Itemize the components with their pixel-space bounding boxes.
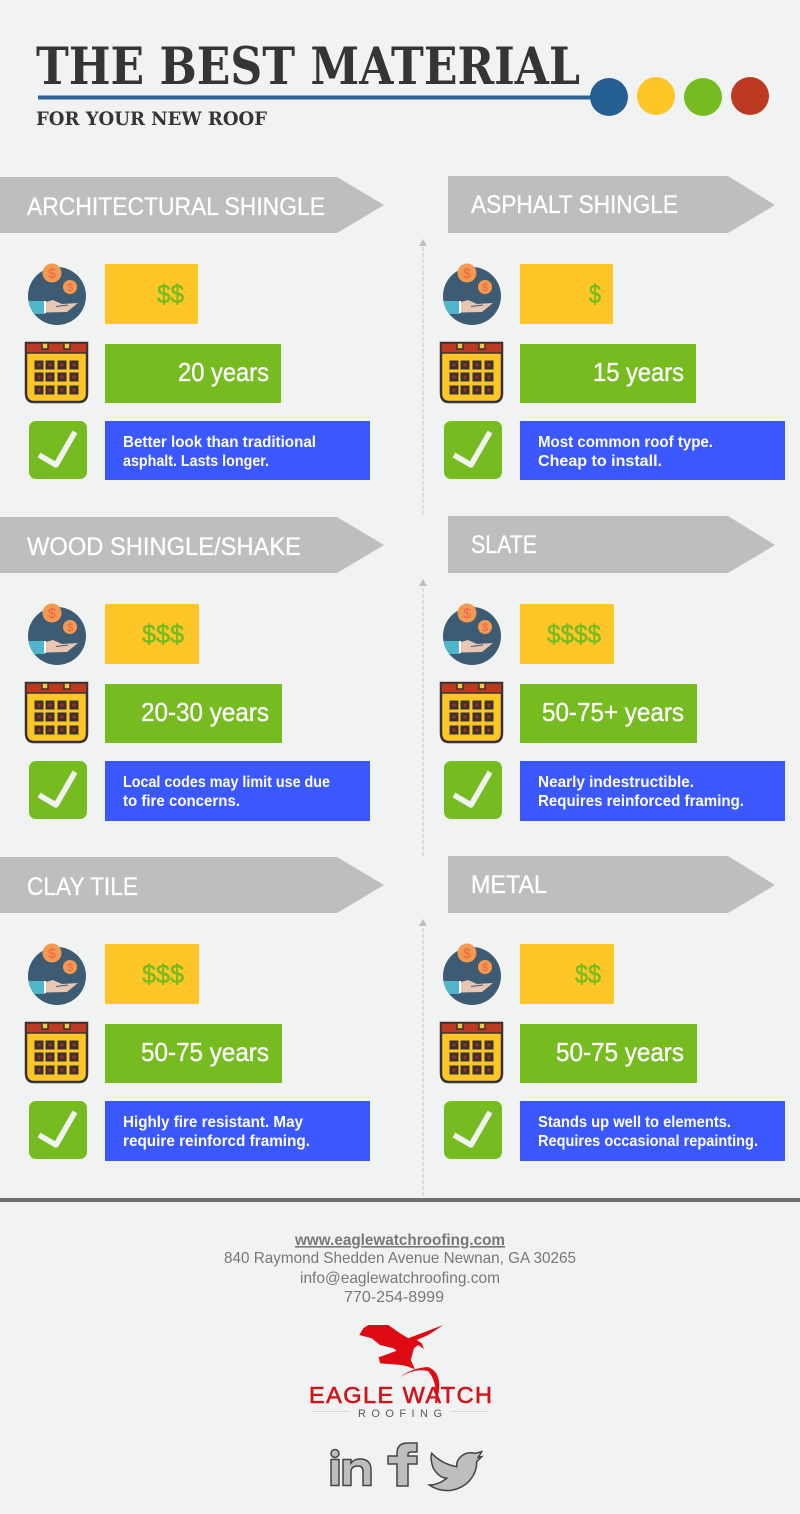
icons	[441, 264, 502, 479]
heading	[0, 857, 384, 913]
description: Requires occasional repainting.	[538, 1133, 758, 1150]
description: Nearly indestructible.	[538, 774, 694, 791]
dashed arrow 3	[419, 919, 427, 1196]
roofing: ROOFING	[358, 1408, 442, 1420]
description: Better look than traditional	[123, 434, 316, 451]
lifespan	[520, 1024, 697, 1083]
description	[105, 1101, 370, 1161]
description	[520, 1101, 785, 1161]
description	[105, 761, 370, 821]
title underline	[38, 96, 593, 100]
icons	[26, 604, 87, 819]
heading: ARCHITECTURAL SHINGLE	[27, 193, 325, 221]
lifespan: 50-75 years	[556, 1037, 684, 1067]
cost: $$	[575, 959, 601, 989]
heading: CLAY TILE	[27, 873, 138, 901]
cost	[105, 264, 198, 324]
colour dots	[590, 77, 769, 116]
lifespan: 15 years	[593, 357, 684, 387]
icon: twitter	[429, 1452, 482, 1491]
cost	[520, 604, 614, 664]
panel: architectural shingle	[0, 177, 384, 480]
social icons	[331, 1443, 482, 1491]
footer contact text: 840 Raymond Shedden Avenue Newnan, GA 30265	[224, 1250, 576, 1267]
subtitle: FOR YOUR NEW ROOF	[36, 109, 267, 130]
lifespan: 50-75 years	[141, 1037, 269, 1067]
title: THE BEST MATERIAL	[36, 37, 580, 97]
description	[520, 761, 785, 821]
description: to fire concerns.	[123, 793, 240, 810]
panel: wood shingle/shake	[0, 517, 384, 821]
cost: $$$	[142, 959, 185, 989]
logo: eagle watch roofing	[309, 1325, 492, 1420]
icons	[26, 944, 87, 1159]
heading: METAL	[471, 871, 547, 899]
icon: eagle	[359, 1325, 443, 1403]
heading	[0, 517, 384, 573]
panel: metal	[441, 856, 785, 1161]
lifespan: 20 years	[178, 357, 269, 387]
description: Most common roof type.	[538, 434, 713, 451]
footer contact text	[224, 1232, 576, 1306]
footer contact text: 770-254-8999	[344, 1289, 444, 1306]
cost: $$$	[142, 619, 185, 649]
cost	[520, 944, 614, 1004]
lifespan: 50-75+ years	[542, 697, 684, 727]
icon: facebook	[388, 1443, 417, 1486]
icons	[441, 604, 502, 819]
cost	[520, 264, 613, 324]
heading: SLATE	[471, 531, 537, 559]
lifespan	[520, 344, 696, 403]
cost: $$$$	[547, 619, 602, 649]
lifespan: 20-30 years	[141, 697, 269, 727]
description: Highly fire resistant. May	[123, 1114, 303, 1131]
description: Cheap to install.	[538, 453, 662, 470]
panel: asphalt shingle	[441, 176, 785, 480]
cost: $$	[157, 279, 185, 309]
description: asphalt. Lasts longer.	[123, 453, 269, 470]
heading	[448, 856, 775, 913]
description: Local codes may limit use due	[123, 774, 330, 791]
lifespan	[105, 684, 282, 743]
icons	[441, 944, 502, 1159]
heading	[448, 176, 775, 233]
description	[105, 421, 370, 480]
description: Requires reinforced framing.	[538, 793, 744, 810]
description	[520, 421, 785, 480]
lifespan	[520, 684, 697, 743]
panel: slate	[441, 516, 785, 821]
cost	[105, 944, 199, 1004]
cost: $	[589, 279, 601, 309]
heading: ASPHALT SHINGLE	[471, 191, 678, 219]
icon: linkedin	[331, 1450, 371, 1486]
panel: clay tile	[0, 857, 384, 1161]
heading	[448, 516, 775, 573]
footer contact text: www.eaglewatchroofing.com	[294, 1232, 505, 1249]
description: require reinforcd framing.	[123, 1133, 310, 1150]
cost	[105, 604, 199, 664]
lifespan	[105, 1024, 282, 1083]
dashed arrow 2	[419, 579, 427, 856]
footer contact text: info@eaglewatchroofing.com	[300, 1270, 500, 1287]
wordmark: EAGLE WATCH	[309, 1382, 492, 1408]
heading: WOOD SHINGLE/SHAKE	[27, 533, 301, 561]
dashed arrow 1	[419, 239, 427, 515]
icons	[26, 264, 87, 479]
lifespan	[105, 344, 281, 403]
heading	[0, 177, 384, 233]
description: Stands up well to elements.	[538, 1114, 731, 1131]
